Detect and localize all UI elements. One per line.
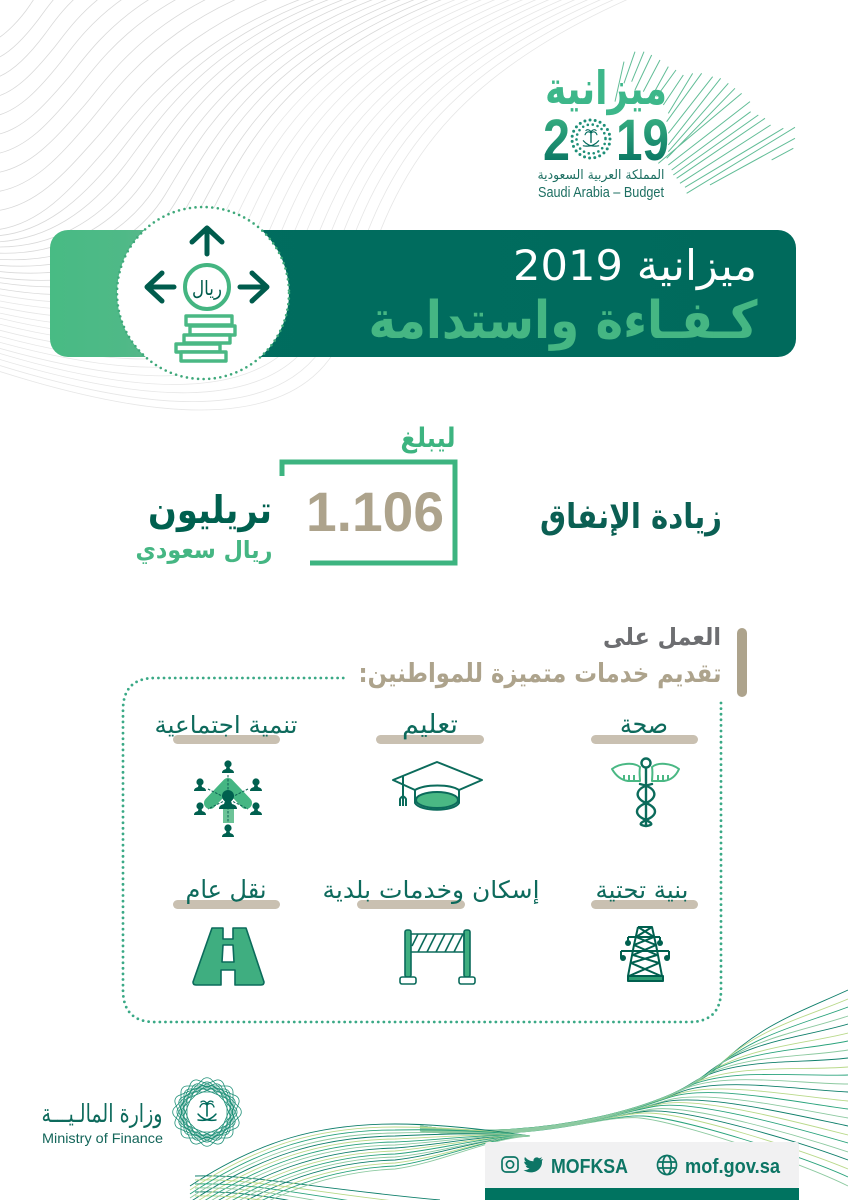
pill bbox=[173, 900, 280, 909]
icon: riyal coin with arrows and stack bbox=[117, 207, 289, 379]
section heading bbox=[358, 623, 747, 697]
logo: Ministry of Finance bbox=[42, 1075, 244, 1149]
handle: MOFKSA bbox=[551, 1156, 628, 1178]
label: بنية تحتية bbox=[596, 876, 688, 904]
banner bbox=[50, 207, 796, 379]
service: public transport bbox=[173, 875, 280, 985]
label: نقل عام bbox=[186, 875, 266, 904]
footer contact bar bbox=[485, 1142, 799, 1200]
stat: amount bbox=[136, 423, 456, 564]
icon: riyal coin with arrows and stack: ريال bbox=[192, 276, 222, 300]
rosette emblem bbox=[170, 1075, 244, 1149]
stat: spending increase label: زيادة الإنفاق bbox=[540, 497, 722, 537]
footer strip bbox=[485, 1188, 799, 1200]
logo: Budget 2019 bbox=[538, 52, 795, 201]
pill bbox=[591, 735, 698, 744]
service: health bbox=[591, 710, 698, 826]
amount lead-in word: ليبلغ bbox=[400, 423, 456, 454]
label: إسكان وخدمات بلدية bbox=[322, 876, 540, 905]
footer panel bbox=[485, 1142, 799, 1189]
amount currency: ريال سعودي bbox=[136, 536, 272, 564]
background: bottom green wave lines bbox=[190, 990, 848, 1200]
label: تعليم bbox=[402, 710, 458, 740]
service: social development bbox=[154, 711, 298, 837]
pill bbox=[376, 735, 484, 744]
amount bracket bbox=[282, 462, 455, 563]
background: top-left grey contour lines bbox=[0, 0, 700, 410]
logo year digit 2: 2 bbox=[543, 108, 570, 173]
heading line 2: تقديم خدمات متميزة للمواطنين: bbox=[358, 659, 722, 689]
pill bbox=[591, 900, 698, 909]
icon: people network bbox=[194, 760, 262, 837]
logo English subtitle: Saudi Arabia – Budget bbox=[538, 184, 665, 201]
service: infrastructure bbox=[591, 876, 698, 981]
banner title line 2: كـفـاءة واستدامة bbox=[368, 291, 758, 351]
logo map lines bbox=[615, 52, 795, 193]
pill bbox=[173, 735, 280, 744]
label: تنمية اجتماعية bbox=[154, 711, 298, 739]
label: صحة bbox=[620, 710, 668, 740]
icon: globe bbox=[658, 1156, 676, 1174]
logo emblem bbox=[572, 120, 610, 158]
English name: Ministry of Finance bbox=[42, 1130, 163, 1146]
icon: caduceus bbox=[612, 758, 679, 826]
heading bar bbox=[737, 628, 747, 697]
icon: graduation cap bbox=[393, 762, 482, 810]
icon: instagram bbox=[502, 1157, 518, 1172]
pill bbox=[357, 900, 465, 909]
Arabic name: وزارة المالـيـــة bbox=[42, 1099, 162, 1129]
logo year digits 19: 19 bbox=[616, 108, 669, 173]
banner title line 1: ميزانية 2019 bbox=[513, 241, 757, 290]
website: mof.gov.sa bbox=[685, 1156, 781, 1178]
heading line 1: العمل على bbox=[603, 623, 721, 651]
service: housing and municipal services bbox=[322, 876, 540, 984]
icon: road bbox=[193, 928, 264, 985]
panel: services dotted frame bbox=[123, 678, 721, 1022]
service: education bbox=[376, 710, 484, 810]
icon: barrier bbox=[400, 930, 475, 984]
icon: twitter bbox=[524, 1157, 543, 1172]
amount unit: تريليون bbox=[148, 488, 272, 532]
logo Arabic subtitle: المملكة العربية السعودية bbox=[538, 168, 664, 183]
icon: power tower bbox=[620, 927, 670, 981]
banner background bbox=[50, 230, 796, 357]
amount number: 1.106 bbox=[306, 480, 444, 543]
logo title: ميزانية bbox=[545, 61, 667, 115]
